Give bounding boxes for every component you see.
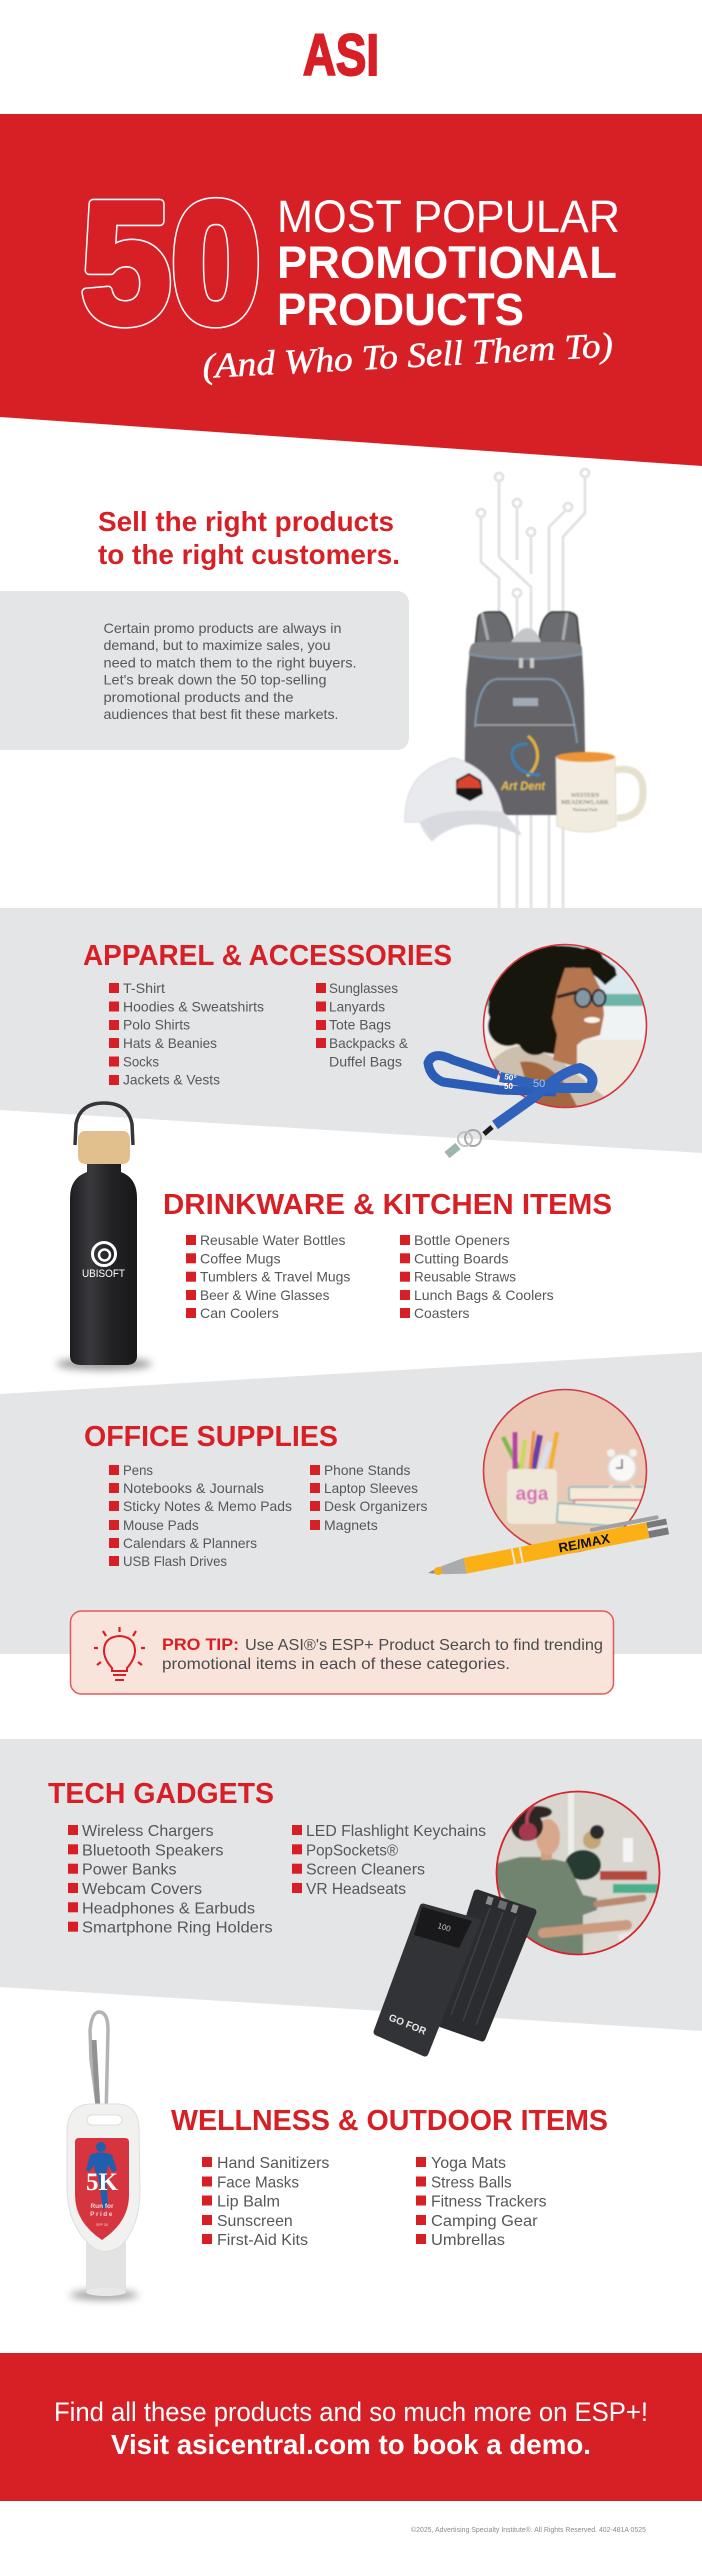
subtitle script: (And Who To Sell Them To) bbox=[201, 326, 614, 386]
title line: most popular: MOST POPULAR bbox=[277, 191, 620, 242]
list: office column 2: Desk Organizers bbox=[324, 1498, 427, 1514]
icon: blue runner bbox=[86, 2142, 117, 2210]
list: tech column 1: Smartphone Ring Holders bbox=[82, 1920, 273, 1937]
list: wellness column 1: First-Aid Kits bbox=[217, 2232, 308, 2249]
product photo: blue lanyard: 50 bbox=[504, 1082, 513, 1091]
icon: light bulb bbox=[94, 1627, 145, 1680]
list: apparel column 1: Hats & Beanies bbox=[123, 1035, 217, 1051]
list: office column 2: Phone Stands bbox=[324, 1462, 410, 1478]
list: tech column 1: Headphones & Earbuds bbox=[82, 1900, 255, 1917]
list: office column 1: Calendars & Planners bbox=[123, 1535, 257, 1551]
callout: pro tip: Use ASI®'s ESP+ Product Search to find trending bbox=[245, 1637, 603, 1654]
list: drinkware column 1: Beer & Wine Glasses bbox=[200, 1287, 329, 1303]
product photo: sunscreen bottle with carabiner: SPF 30 bbox=[96, 2223, 108, 2227]
list: drinkware column 2: Cutting Boards bbox=[414, 1250, 508, 1266]
list: drinkware column 1: Reusable Water Bottles bbox=[200, 1232, 346, 1248]
product photo: blue lanyard: 50 bbox=[533, 1078, 545, 1090]
list: apparel column 2: Backpacks & bbox=[329, 1035, 409, 1051]
product photo: backpack: Art Dent bbox=[500, 779, 546, 793]
panel: intro text box: Let's break down the 50 top-selling bbox=[104, 672, 326, 688]
list: drinkware column 2: Lunch Bags & Coolers bbox=[414, 1287, 554, 1303]
list: office column 1: Sticky Notes & Memo Pads bbox=[123, 1498, 292, 1514]
callout: pro tip bbox=[70, 1611, 614, 1694]
list: wellness column 1: Hand Sanitizers bbox=[217, 2155, 329, 2172]
panel: office supplies background bbox=[0, 1352, 702, 1654]
list: tech column 2: Screen Cleaners bbox=[306, 1862, 425, 1879]
list: office column 1: USB Flash Drives bbox=[123, 1553, 227, 1569]
list: office column 1: Notebooks & Journals bbox=[123, 1480, 264, 1496]
title number: 50: 50 bbox=[81, 167, 261, 359]
list: office column 2: Laptop Sleeves bbox=[324, 1480, 418, 1496]
panel: intro text box: audiences that best fit these markets. bbox=[104, 706, 338, 722]
list: wellness column 1 bbox=[202, 2155, 329, 2249]
title number: 50: 50 bbox=[81, 167, 261, 359]
panel: intro text box: promotional products and the bbox=[104, 689, 294, 705]
list: wellness column 2: Yoga Mats bbox=[431, 2155, 506, 2172]
list: wellness column 1: Sunscreen bbox=[217, 2213, 293, 2230]
list: tech column 1 bbox=[68, 1823, 273, 1937]
product photo: yellow RE/MAX pen: RE/MAX bbox=[557, 1531, 611, 1555]
panel: tech gadgets background bbox=[0, 1739, 702, 2031]
list: tech column 2 bbox=[292, 1823, 486, 1898]
product photo: black Ubisoft water bottle bbox=[56, 1103, 152, 1370]
list: wellness column 1: Face Masks bbox=[217, 2174, 299, 2192]
photo: woman with headphones at desk bbox=[496, 1790, 660, 1956]
list: drinkware column 2: Coasters bbox=[414, 1305, 470, 1321]
list: tech column 2: PopSockets® bbox=[306, 1842, 398, 1859]
heading: office supplies: OFFICE SUPPLIES bbox=[84, 1421, 338, 1453]
list: wellness column 2: Stress Balls bbox=[431, 2174, 512, 2192]
list: apparel column 2 bbox=[316, 980, 409, 1069]
product photo: sunscreen bottle with carabiner: 5K bbox=[86, 2169, 119, 2196]
list: apparel column 1: Jackets & Vests bbox=[123, 1072, 220, 1088]
list: apparel column 2: Tote Bags bbox=[329, 1017, 391, 1033]
list: apparel column 1: Hoodies & Sweatshirts bbox=[123, 998, 264, 1014]
list: wellness column 2 bbox=[416, 2155, 546, 2249]
list: tech column 1: Power Banks bbox=[82, 1862, 176, 1879]
photo: desk with pen cup, books and clock bbox=[480, 1385, 650, 1557]
list: apparel column 2: Lanyards bbox=[329, 998, 385, 1014]
product photo: orange mug: National Park bbox=[573, 807, 598, 812]
list: apparel column 1: Polo Shirts bbox=[123, 1017, 190, 1033]
list: tech column 2: LED Flashlight Keychains bbox=[306, 1823, 486, 1840]
product photo: white cap bbox=[405, 758, 521, 841]
product photo: blue lanyard bbox=[428, 1056, 592, 1155]
list: tech column 2: VR Headseats bbox=[306, 1881, 406, 1898]
list: drinkware column 1: Coffee Mugs bbox=[200, 1250, 281, 1266]
list: office column 2: Magnets bbox=[324, 1517, 378, 1533]
list: apparel column 1 bbox=[109, 980, 264, 1088]
title line: promotional: PROMOTIONAL bbox=[277, 237, 617, 288]
copyright note: ©2025, Advertising Specialty Institute®. All Rights Reserved. 402-481A 0525 bbox=[411, 2526, 646, 2534]
list: drinkware column 2 bbox=[400, 1232, 554, 1321]
product photo: orange mug: WESTERN bbox=[571, 793, 600, 799]
list: apparel column 1: T-Shirt bbox=[123, 980, 165, 996]
callout: pro tip: promotional items in each of these categories. bbox=[162, 1656, 510, 1673]
product photo: black Ubisoft water bottle: UBISOFT bbox=[82, 1268, 125, 1280]
list: drinkware column 1: Tumblers & Travel Mugs bbox=[200, 1269, 350, 1285]
heading: tech gadgets: TECH GADGETS bbox=[48, 1778, 274, 1810]
product photo: backpack bbox=[464, 612, 586, 815]
photo: desk with pen cup, books and clock: aga bbox=[516, 1484, 549, 1505]
list: drinkware column 2: Bottle Openers bbox=[414, 1232, 510, 1248]
list: tech column 1: Webcam Covers bbox=[82, 1881, 202, 1898]
heading: sell the right products: Sell the right products bbox=[98, 506, 394, 537]
logo: ASI: ASI bbox=[303, 23, 379, 88]
title line: products: PRODUCTS bbox=[277, 284, 524, 335]
heading: apparel and accessories: APPAREL & ACCESSORIES bbox=[83, 940, 452, 972]
list: tech column 1: Bluetooth Speakers bbox=[82, 1842, 224, 1859]
panel: intro text box: Certain promo products are always in bbox=[104, 620, 342, 636]
list: wellness column 1: Lip Balm bbox=[217, 2194, 280, 2210]
panel: hero banner bbox=[0, 114, 702, 466]
list: office column 1 bbox=[109, 1462, 292, 1569]
panel: intro text box: need to match them to the right buyers. bbox=[104, 654, 356, 670]
heading: sell the right products bbox=[98, 506, 400, 570]
list: wellness column 2: Umbrellas bbox=[431, 2232, 505, 2249]
list: office column 1: Pens bbox=[123, 1462, 153, 1478]
list: tech column 1: Wireless Chargers bbox=[82, 1823, 214, 1840]
product photo: sunscreen bottle with carabiner: Pride bbox=[90, 2211, 114, 2218]
panel: footer call to action: Visit asicentral.com to book a demo. bbox=[111, 2429, 591, 2460]
list: office column 1: Mouse Pads bbox=[123, 1517, 199, 1533]
callout: pro tip: PRO TIP: bbox=[162, 1635, 239, 1654]
list: office column 2 bbox=[310, 1462, 427, 1533]
list: apparel column 2: Sunglasses bbox=[329, 980, 398, 996]
photo: woman in sunglasses on beach bbox=[480, 940, 650, 1112]
product photo: black power banks: 100 bbox=[436, 1921, 452, 1934]
heading: wellness and outdoor items: WELLNESS & OUTDOOR ITEMS bbox=[171, 2105, 608, 2137]
panel: intro text box bbox=[0, 591, 409, 750]
product photo: sunscreen bottle with carabiner: Run for bbox=[90, 2203, 114, 2210]
list: wellness column 2: Camping Gear bbox=[431, 2213, 538, 2230]
product photo: orange mug bbox=[556, 752, 643, 832]
list: wellness column 2: Fitness Trackers bbox=[431, 2194, 546, 2210]
panel: footer call to action bbox=[0, 2353, 702, 2501]
product photo: orange mug: MEADOWLARK bbox=[561, 799, 609, 806]
list: apparel column 2: Duffel Bags bbox=[329, 1053, 402, 1069]
panel: apparel background bbox=[0, 908, 702, 1153]
product photo: black power banks bbox=[377, 1893, 533, 2053]
product photo: blue lanyard: 50° bbox=[504, 1072, 517, 1083]
heading: sell the right products: to the right customers. bbox=[98, 539, 400, 570]
product photo: sunscreen bottle with carabiner bbox=[67, 2012, 140, 2300]
product photo: black power banks: GO FOR bbox=[387, 2013, 428, 2038]
panel: intro text box: demand, but to maximize sales, you bbox=[104, 637, 330, 653]
circuit line decoration bbox=[477, 469, 589, 908]
heading: drinkware and kitchen items: DRINKWARE & KITCHEN ITEMS bbox=[163, 1189, 612, 1221]
list: apparel column 1: Socks bbox=[123, 1053, 159, 1069]
product photo: yellow RE/MAX pen bbox=[426, 1514, 669, 1581]
list: drinkware column 1: Can Coolers bbox=[200, 1305, 279, 1321]
list: drinkware column 1 bbox=[186, 1232, 350, 1321]
list: drinkware column 2: Reusable Straws bbox=[414, 1269, 516, 1285]
icon: ubisoft swirl bbox=[92, 1242, 116, 1266]
panel: footer call to action: Find all these products and so much more on ESP+! bbox=[54, 2397, 648, 2427]
